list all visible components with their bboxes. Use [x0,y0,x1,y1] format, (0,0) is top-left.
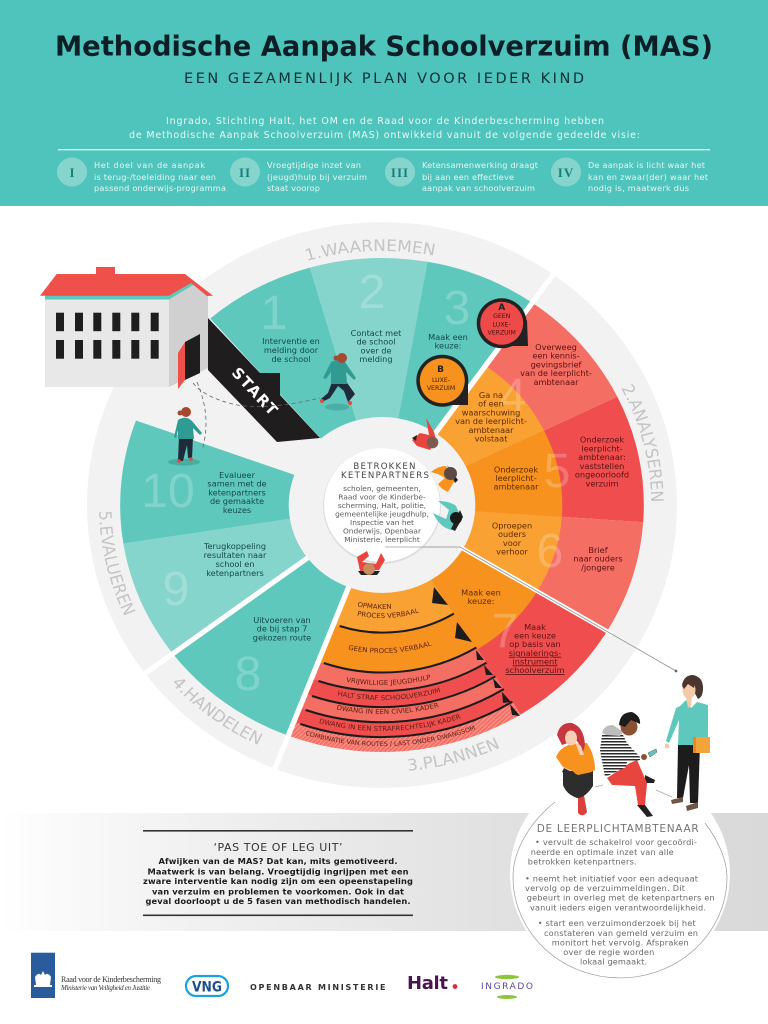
step 9 text: ketenpartners [206,568,264,578]
route labels: GEEN PROCES VERBAAL [348,641,432,654]
step 5 outer text: Onderzoek [580,434,624,444]
segment numbers: 7 [492,605,518,658]
step 7 outer text: op basis van [509,639,561,649]
callout: pas toe of leg uit: Maatwerk is van belang. Vroegtijdig ingrijpen met een [148,866,409,876]
step 10 text: ketenpartners [208,487,266,497]
segment 4 inner [382,366,544,505]
centre circle: betrokken ketenpartners: BETROKKEN [353,462,417,472]
segment 6 outer [382,505,643,630]
segment numbers [141,266,570,701]
vision I: I [69,165,75,180]
centre circle: betrokken ketenpartners: KETENPARTNERS [341,471,429,481]
centre circle: betrokken ketenpartners: scholen, gemeenten, [343,484,421,493]
step 4 outer text: Overweeg [535,342,577,352]
small floor lines [595,785,672,797]
step 6 inner text: verhoor [496,547,528,557]
segment 7 outer [382,505,608,714]
logo: VNG [186,976,228,996]
school building [40,267,213,389]
step 6 inner text: Oproepen [492,520,532,530]
step 7 outer text: instrument [513,656,558,666]
step 5 outer text: leerplicht- [581,443,623,453]
vision IV: nodig is, maatwerk dus [588,183,689,193]
bullets: neerde en optimale inzet van alle [531,847,674,857]
callout: pas toe of leg uit [143,830,413,916]
bullets: • vervult de schakelrol voor gecoördi- [535,837,697,847]
badge A: A [498,303,505,313]
bullets: monitort het vervolg. Afspraken [552,937,689,947]
vision I: Het doel van de aanpak [94,160,205,170]
bullets: constateren van gemeld verzuim en [544,928,698,938]
start arrow: START [228,364,282,420]
phase label 3: 3.PLANNEN [408,738,499,771]
vision III [385,158,539,193]
centre circle: betrokken ketenpartners [323,448,441,564]
segment 9 [123,505,382,654]
step 6 outer text: /jongere [581,562,615,572]
route labels: VRIJWILLIGE JEUGDHULP [346,674,430,686]
outer phase ring [87,222,677,788]
step 1 text: Interventie en [262,336,320,346]
centre circle: betrokken ketenpartners: Ministerie, leerplicht [344,535,420,544]
step 1 text: melding door [264,345,319,355]
hub person orange [431,465,458,492]
bullets: gebeurt in overleg met de ketenpartners en [527,893,715,903]
step 4 inner text: ambtenaar [468,425,514,435]
bullets: over de regie worden [563,947,654,957]
hub person red bottom [357,551,385,575]
badge A: GEEN [493,313,511,320]
step 1 text: de school [271,354,311,364]
vision I: passend onderwijs-programma [94,183,226,193]
bullets: vervolg op de verzuimmeldingen. Dit [525,883,686,893]
step 5 inner text: ambtenaar [493,482,539,492]
white circle: de leerplichtambtenaar [510,766,730,982]
callout: pas toe of leg uit: geval doorloopt u de 5 fasen van methodisch handelen. [146,896,410,906]
route labels [306,602,476,746]
vision IV [551,158,709,193]
bullets [525,837,715,966]
bullets: • start een verzuimonderzoek bij het [538,918,696,928]
header panel [0,0,768,206]
segment numbers: 8 [235,648,261,701]
segment numbers: 3 [444,282,470,335]
step 2 text: Contact met [351,328,402,338]
segment numbers: 1 [261,287,287,340]
step 6 inner text: voor [503,538,522,548]
vision II: II [239,165,251,180]
step 5 inner text: leerplicht- [495,473,537,483]
step 10 text: Evalueer [219,470,256,480]
phase label 1: 1.WAARNEMEN [306,239,435,260]
title: Methodische Aanpak Schoolverzuim (MAS) [55,30,713,62]
illustration: girl [556,723,595,815]
vision III: Ketensamenwerking draagt [422,160,539,170]
grey band behind callouts [0,813,768,931]
step 10 text: keuzes [223,505,251,515]
bullets: • neemt het initiatief voor een adequaat [525,874,699,884]
segment numbers: 5 [544,445,570,498]
centre circle: betrokken ketenpartners: Onderwijs, Openbaar [343,526,422,536]
step 6 outer text: naar ouders [573,554,623,564]
step 10 text: de gemaakte [210,496,264,506]
callout: pas toe of leg uit: zware interventie kan nodig zijn om een opeenstapeling [143,876,413,886]
intro text: de Methodische Aanpak Schoolverzuim (MAS) ontwikkeld vanuit de volgende gedeelde visie: [129,130,640,141]
segment numbers: 9 [163,563,189,616]
step 8 text: Uitvoeren van [253,615,311,625]
intro text [129,116,640,141]
step 5 outer text: verzuim [586,478,619,488]
step 5 outer text: ongeoorloofd [575,470,629,480]
badge A: VERZUIM [488,330,516,336]
step 9 text: resultaten naar [204,550,267,560]
segment numbers: 2 [359,266,385,319]
intro text: Ingrado, Stichting Halt, het OM en de Raad voor de Kinderbescherming hebben [166,116,604,127]
callout: pas toe of leg uit: van verzuim en problemen te voorkomen. Ook in dat [152,886,404,896]
step 9 text: Terugkoppeling [203,541,266,551]
vision II: staat voorop [267,183,320,193]
segment 7 inner [382,505,537,649]
phase label 4: 4.HANDELEN [174,679,262,744]
inner hub [289,417,475,593]
start arrow [208,318,320,442]
bullets: betrokken ketenpartners. [528,856,637,866]
step 7 outer text: een keuze [514,631,556,641]
vision III: III [391,165,409,180]
segment 8 [173,505,382,736]
step 4 outer text: van de leerplicht- [520,368,592,378]
subtitle: EEN GEZAMENLIJK PLAN VOOR IEDER KIND [184,71,584,87]
step 7 inner text: Maak een [461,588,501,598]
step 7 outer text: signalerings- [509,648,561,658]
step 2 text: de school [356,337,396,347]
step 5 inner text: Onderzoek [494,464,538,474]
logo: raad voor de kinderbescherming: Ministerie van Veiligheid en Justitie [60,984,150,992]
step 4 outer text: een kennis- [532,351,580,361]
running person [320,353,356,410]
logo: VNG: VNG [192,980,222,996]
vision II: (jeugd)hulp bij verzuim [267,172,367,182]
step 9 text: school en [215,559,255,569]
logo: halt: Halt [407,973,448,994]
phase label 2: 2.ANALYSEREN [622,384,664,501]
segment 6 inner [382,505,562,591]
segment 1 [210,268,382,505]
segment numbers: 6 [537,525,563,578]
standing person [168,407,202,466]
step 4 inner text: of een [478,399,504,409]
vision I [57,158,226,193]
route labels: DWANG IN EEN CIVIEL KADER [337,702,439,714]
illustration: officer [665,675,710,811]
step 7 outer text: schoolverzuim [505,665,565,675]
step 2 text: melding [359,354,393,364]
step 2 text: over de [360,345,392,355]
route labels: COMBINATIE VAN ROUTES / LAST ONDER DWANGSOM [306,725,476,746]
heading: DE LEERPLICHTAMBTENAAR [537,823,699,835]
segment numbers: 4 [500,370,526,423]
step 5 outer text: vaststellen [580,461,624,471]
centre circle: betrokken ketenpartners: gemeentelijke jeugdhulp, [335,510,429,518]
segment 5 inner [382,430,562,517]
step 8 text: de bij stap 7 [257,624,307,634]
route labels: PROCES VERBAAL [358,608,420,618]
step 7 outer text: Maak [524,622,546,632]
step 4 inner text: volstaat [475,434,508,444]
vision IV: De aanpak is licht waar het [588,160,706,170]
badge B [416,355,468,407]
step 4 outer text: ambtenaar [533,377,579,387]
badge B: VERZUIM [427,385,455,392]
centre circle: betrokken ketenpartners: scherming, Halt, politie, [338,501,426,510]
vision III: aanpak van schoolverzuim [422,183,535,193]
segment 2 [310,258,427,505]
step 8 text: gekozen route [253,632,311,642]
step 6 outer text: Brief [588,545,609,555]
segment 5 outer [382,397,644,522]
dashed walking paths [193,382,320,450]
step 4 inner text: waarschuwing [462,407,520,417]
hub person red top [412,418,438,450]
segment 10 [120,420,382,544]
route arrowheads [432,587,520,716]
badge A: LUXE- [493,322,511,328]
logo: ingrado [481,975,533,999]
step 4 inner text: van de leerplicht- [455,416,527,426]
step 6 inner text: ouders [498,529,526,539]
vision II: Vroegtijdige inzet van [267,160,361,170]
logo: raad voor de kinderbescherming: Raad voor de Kinderbescherming [61,975,161,984]
logo: openbaar ministerie: OPENBAAR MINISTERIE [250,983,386,992]
segment 3 [382,262,532,505]
centre circle: betrokken ketenpartners: Raad voor de Kinderbe- [338,492,426,502]
route labels: DWANG IN EEN STRAFRECHTELIJK KADER [320,714,461,731]
hub person teal [433,501,463,531]
vision III: bij aan een effectieve [422,172,514,182]
badge A [477,298,528,348]
bullets: lokaal gemaakt. [580,956,647,966]
logo: ingrado: INGRADO [481,982,533,992]
illustration: boy [600,712,657,817]
vision IV: kan en zwaar(der) waar het [588,172,709,182]
vision IV: IV [558,165,574,180]
vision I: is terug-/toeleiding naar een [94,172,216,182]
logo: raad voor de kinderbescherming [31,953,161,998]
step 4 outer text: gevingsbrief [531,359,582,369]
vision II [230,158,367,193]
route labels: OPMAKEN [358,602,391,609]
step 3 text: Maak een [428,332,468,342]
plan route bands [288,505,521,752]
connector line to officer [385,547,677,672]
phase label 5: 5.EVALUEREN [99,512,136,616]
badge B: B [437,365,444,375]
process wheel [87,222,677,788]
step 10 text: samen met de [207,479,267,489]
segment numbers: 10 [141,465,195,518]
step 3 text: keuze: [435,340,461,350]
bullets: vanuit ieders eigen verantwoordelijkheid. [530,902,706,912]
centre circle: betrokken ketenpartners: Inspectie van het [350,518,414,527]
badge B: LUXE- [432,377,450,384]
step 5 outer text: ambtenaar: [578,452,626,462]
segment 4 outer [382,303,617,505]
step 7 inner text: keuze: [468,596,494,606]
callout: pas toe of leg uit: ‘PAS TOE OF LEG UIT’ [214,841,342,854]
step 4 inner text: Ga na [479,390,503,400]
callout: pas toe of leg uit: Afwijken van de MAS? Dat kan, mits gemotiveerd. [158,856,398,866]
route labels: HALT STRAF SCHOOLVERZUIM [338,688,440,700]
